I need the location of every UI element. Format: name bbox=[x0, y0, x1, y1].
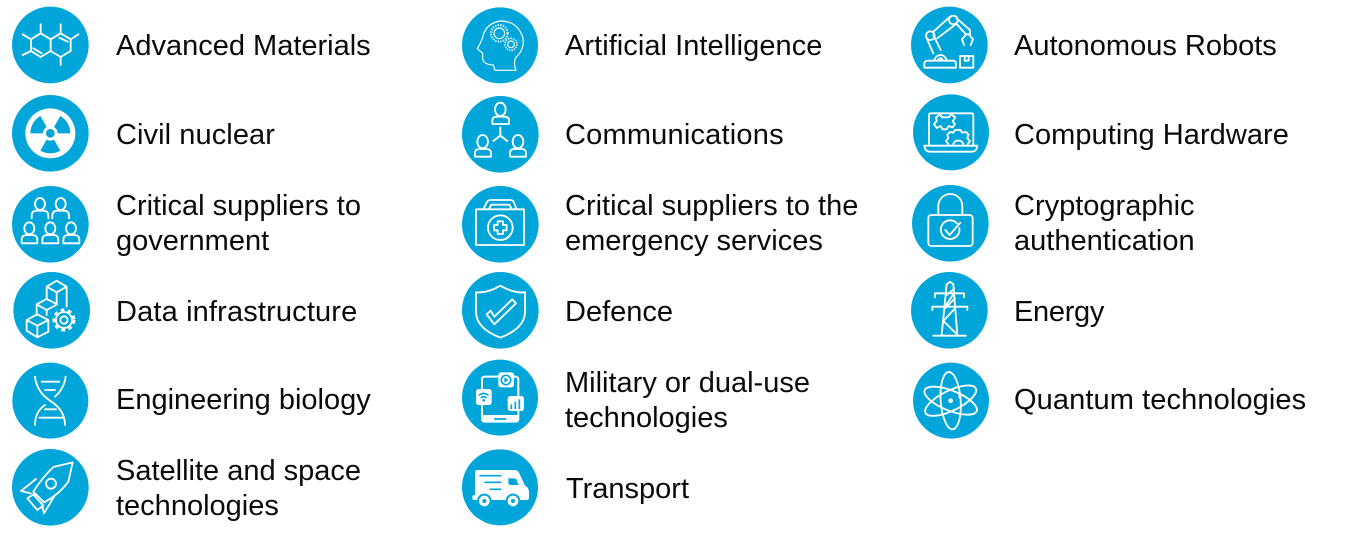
item: Critical suppliers to government bbox=[12, 186, 361, 263]
label: Data infrastructure bbox=[116, 296, 357, 328]
label: Critical suppliers to bbox=[116, 190, 361, 222]
label: Energy bbox=[1014, 296, 1105, 328]
icon: rocket bbox=[12, 449, 89, 526]
item: Cryptographic authentication bbox=[912, 185, 1195, 262]
label: Cryptographic bbox=[1014, 190, 1195, 222]
icon: shield with check bbox=[462, 272, 539, 349]
item: Defence bbox=[462, 272, 673, 349]
item: Critical suppliers to the emergency services bbox=[462, 186, 858, 263]
item: Communications bbox=[462, 96, 784, 173]
label: Civil nuclear bbox=[116, 119, 275, 151]
label: technologies bbox=[565, 402, 728, 434]
label: emergency services bbox=[565, 225, 823, 257]
item: Civil nuclear bbox=[12, 95, 275, 172]
icon: medical kit bbox=[462, 186, 539, 263]
label: Quantum technologies bbox=[1014, 384, 1306, 416]
icon: radiation bbox=[12, 95, 89, 172]
icon: connected people bbox=[462, 96, 539, 173]
icon: power pylon bbox=[911, 272, 988, 349]
icon: DNA helix bbox=[12, 363, 88, 439]
icon: laptop with gears bbox=[913, 94, 989, 170]
item: Data infrastructure bbox=[13, 272, 357, 349]
label: Communications bbox=[565, 119, 784, 151]
label: Critical suppliers to the bbox=[565, 190, 858, 222]
icon: head with gears bbox=[462, 7, 538, 83]
icon: padlock with check bbox=[912, 185, 989, 262]
label: Computing Hardware bbox=[1014, 119, 1289, 151]
label: authentication bbox=[1014, 225, 1195, 257]
item: Quantum technologies bbox=[913, 363, 1306, 439]
label: Transport bbox=[566, 473, 689, 505]
label: Defence bbox=[565, 296, 673, 328]
label: Military or dual-use bbox=[565, 367, 810, 399]
item: Energy bbox=[911, 272, 1105, 349]
item: Advanced Materials bbox=[12, 7, 371, 83]
item: Military or dual-use technologies bbox=[462, 360, 810, 436]
icon: atom bbox=[913, 363, 989, 439]
label: Advanced Materials bbox=[116, 30, 371, 62]
item: Transport bbox=[462, 449, 689, 525]
label: Autonomous Robots bbox=[1014, 30, 1277, 62]
item: Engineering biology bbox=[12, 363, 371, 439]
item: Autonomous Robots bbox=[911, 7, 1277, 83]
label: government bbox=[116, 225, 269, 257]
item: Artificial Intelligence bbox=[462, 7, 822, 83]
item: Satellite and space technologies bbox=[12, 449, 361, 526]
icon: delivery truck bbox=[462, 449, 538, 525]
icon: robot arm bbox=[911, 7, 988, 83]
icon: cubes and gear bbox=[13, 272, 90, 349]
item: Computing Hardware bbox=[913, 94, 1289, 170]
label: Artificial Intelligence bbox=[565, 30, 822, 62]
label: Engineering biology bbox=[116, 384, 371, 416]
icon: molecule bbox=[12, 7, 89, 83]
label: technologies bbox=[116, 490, 279, 522]
label: Satellite and space bbox=[116, 455, 361, 487]
icon: group of people bbox=[12, 186, 89, 263]
icon: tablet with apps bbox=[462, 360, 538, 436]
